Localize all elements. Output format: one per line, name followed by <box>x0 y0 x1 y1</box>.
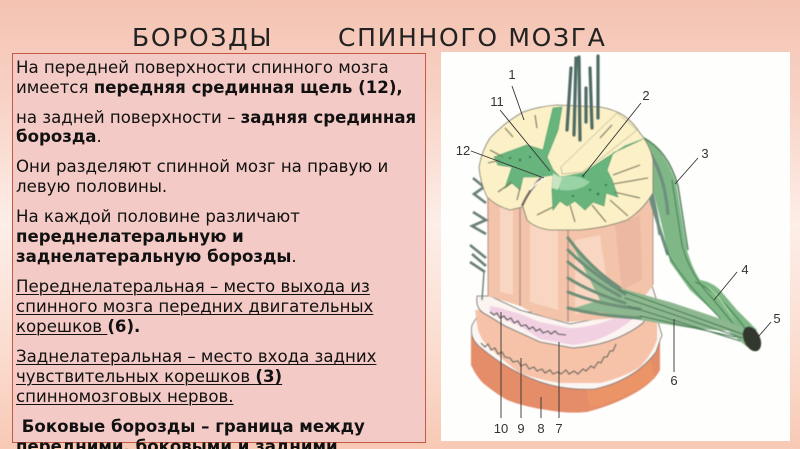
leader lines <box>471 86 771 418</box>
anterior fissure <box>522 178 541 206</box>
cream posterior column <box>561 113 637 174</box>
title: СПИННОГО МОЗГА <box>338 23 607 52</box>
text block: fissure and sulcus: борозда. <box>16 127 102 146</box>
nerve root 6 (anterior) <box>568 236 750 347</box>
anatomical number labels: 10 <box>494 421 508 436</box>
anatomical number labels: 11 <box>490 94 504 109</box>
title <box>132 23 607 52</box>
anterior nerve rootlets <box>470 178 486 300</box>
salmon middle membrane <box>475 310 657 383</box>
anatomical number labels: 7 <box>555 421 563 436</box>
anatomical number labels <box>456 67 781 436</box>
text block: fissure and sulcus: на задней поверхности – задняя срединная <box>16 108 416 127</box>
anatomical number labels: 6 <box>670 373 678 388</box>
cross-section white matter <box>479 105 653 230</box>
text block: halves: Они разделяют спинной мозг на правую и левую половины. <box>16 157 388 196</box>
text block: anterolateral groove: Переднелатеральная – место выхода из спинного мозга передних двигательных корешков (6). <box>16 277 373 336</box>
radial fibres in section <box>488 115 648 222</box>
grey matter specks <box>509 156 607 197</box>
white arachnoid band <box>471 312 662 389</box>
posterior rootlets at top <box>567 56 598 140</box>
orange outer membrane <box>471 335 660 413</box>
wavy membrane edge <box>481 343 616 374</box>
nerve root 3 (posterior) and ganglion 4 <box>643 137 757 346</box>
nerve tip 5 <box>739 324 765 354</box>
panel: text on grooves <box>12 53 426 443</box>
anatomical number labels: 4 <box>741 262 749 277</box>
pink columns of white matter <box>487 190 653 322</box>
text block: lateral grooves: На каждой половине различают переднелатеральную и заднелатеральную борозды. <box>16 207 300 266</box>
text block: fissure and sulcus <box>16 58 416 146</box>
anatomical number labels: 8 <box>537 421 545 436</box>
text block: fissure and sulcus: имеется передняя срединная щель (12), <box>16 78 403 97</box>
anatomical number labels: 12 <box>456 143 470 158</box>
text block: posterolateral groove: Заднелатеральная – место входа задних чувствительных корешков (3) спинномозговых нервов. <box>16 347 376 406</box>
grey matter <box>494 107 643 210</box>
anatomical number labels: 1 <box>508 67 516 82</box>
anatomical number labels: 9 <box>517 421 525 436</box>
anatomical number labels: 2 <box>642 88 650 103</box>
lilac inner membrane <box>477 286 656 348</box>
title: БОРОЗДЫ <box>132 23 273 52</box>
anatomical number labels: 5 <box>773 311 781 326</box>
anatomical number labels: 3 <box>701 146 709 161</box>
text block: fissure and sulcus: На передней поверхности спинного мозга <box>16 58 389 77</box>
